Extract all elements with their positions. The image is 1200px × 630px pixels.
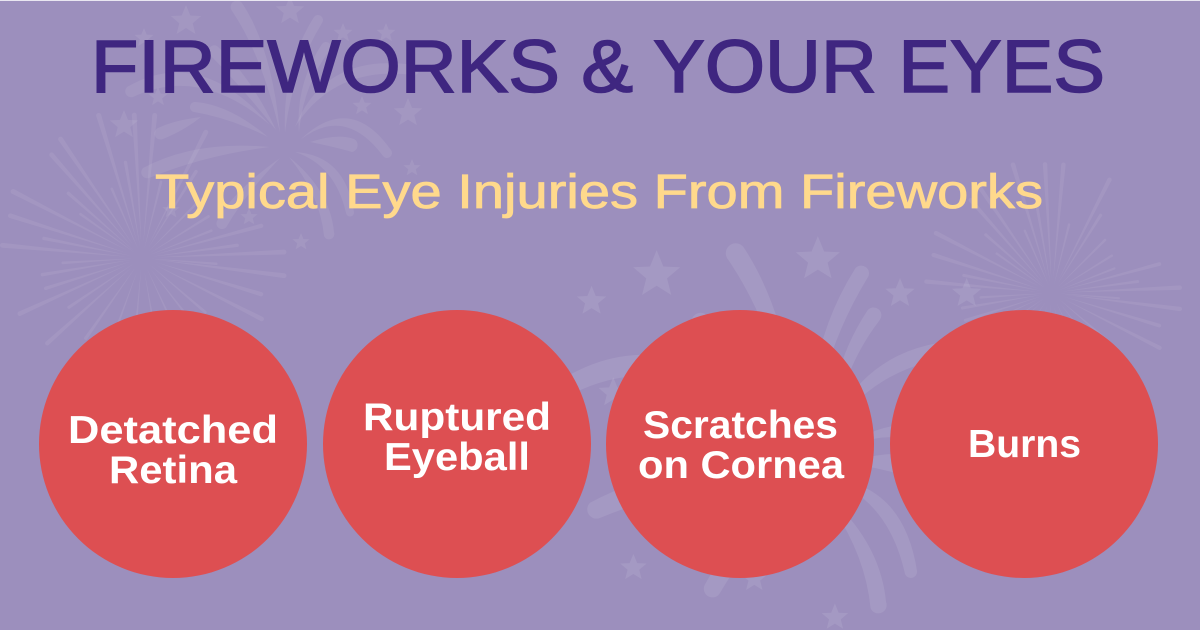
- circle: detached retina: [39, 310, 307, 578]
- circle: ruptured eyeball: Eyeball: [384, 436, 530, 479]
- background burst: left: [0, 112, 287, 386]
- circle: burns: Burns: [968, 423, 1081, 466]
- background firework: lower center: [538, 236, 1023, 629]
- circle: scratches on cornea: on Cornea: [638, 444, 844, 487]
- background burst: right: [924, 162, 1182, 408]
- background firework: top center: [110, 0, 422, 249]
- circle: ruptured eyeball: [323, 310, 591, 578]
- circle: burns: [890, 310, 1158, 578]
- subtitle: Typical Eye Injuries From Fireworks: [155, 166, 1043, 219]
- circle: scratches on cornea: Scratches: [643, 404, 838, 447]
- circle: scratches on cornea: [606, 310, 874, 578]
- title: FIREWORKS & YOUR EYES: [91, 25, 1105, 108]
- circle: detached retina: Retina: [109, 449, 237, 492]
- circle: detached retina: Detatched: [68, 409, 278, 452]
- circle: ruptured eyeball: Ruptured: [363, 396, 551, 439]
